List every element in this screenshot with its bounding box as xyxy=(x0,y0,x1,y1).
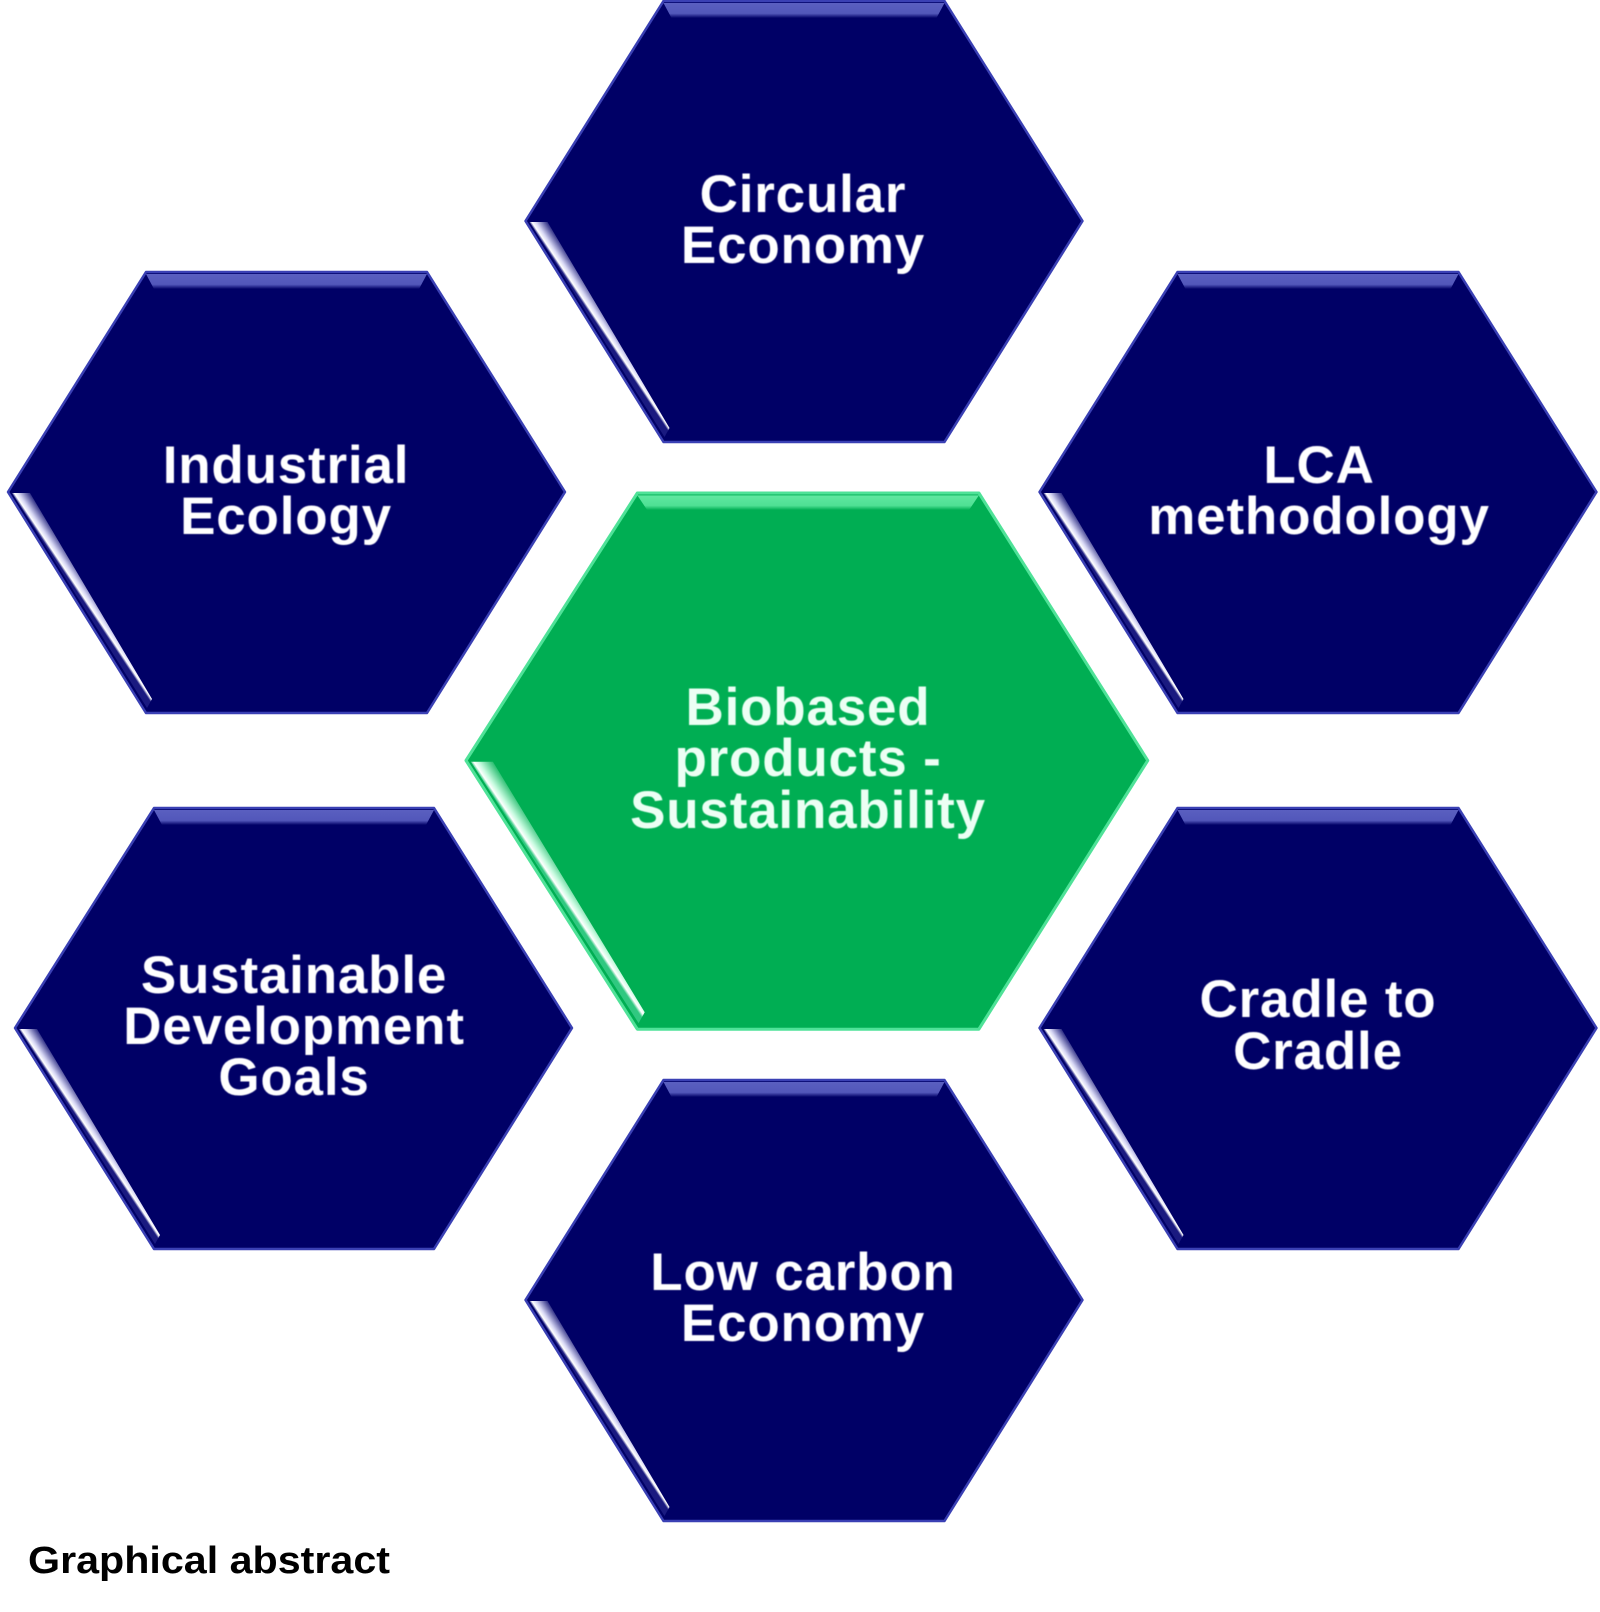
hexagon: Industrial Ecology xyxy=(8,272,565,713)
hexagon: Sustainable Development Goals xyxy=(15,808,572,1249)
hexagon: Industrial Ecology: Ecology xyxy=(180,487,392,546)
hexagon: LCA methodology xyxy=(1040,272,1596,713)
hexagon: Low carbon Economy xyxy=(526,1080,1082,1521)
hexagon: Biobased products - Sustainability (centre): Sustainability xyxy=(630,781,986,840)
hexagon: Circular Economy: Economy xyxy=(681,216,925,275)
hexagon: Biobased products - Sustainability (centre): Biobased xyxy=(686,678,930,737)
hexagon: Sustainable Development Goals: Goals xyxy=(218,1048,370,1107)
hexagon: LCA methodology: LCA xyxy=(1263,436,1375,495)
hexagon: Sustainable Development Goals: Development xyxy=(123,997,465,1056)
caption: Graphical abstract: Graphical abstract xyxy=(28,1540,390,1582)
hexagon: Cradle to Cradle xyxy=(1040,808,1596,1249)
hexagon: Circular Economy xyxy=(526,1,1082,442)
hexagon: Cradle to Cradle: Cradle to xyxy=(1200,970,1436,1029)
hexagon: Industrial Ecology: Industrial xyxy=(163,436,409,495)
hexagon: LCA methodology: methodology xyxy=(1148,487,1490,546)
hexagon: Low carbon Economy: Economy xyxy=(681,1294,925,1353)
hexagon: Biobased products - Sustainability (centre) xyxy=(466,493,1148,1029)
hexagon: Sustainable Development Goals: Sustainable xyxy=(141,946,447,1005)
hexagon: Low carbon Economy: Low carbon xyxy=(650,1243,956,1302)
hexagon: Cradle to Cradle: Cradle xyxy=(1233,1022,1403,1081)
hexagon: Biobased products - Sustainability (centre): products - xyxy=(674,729,942,788)
hexagon: Circular Economy: Circular xyxy=(700,165,906,224)
